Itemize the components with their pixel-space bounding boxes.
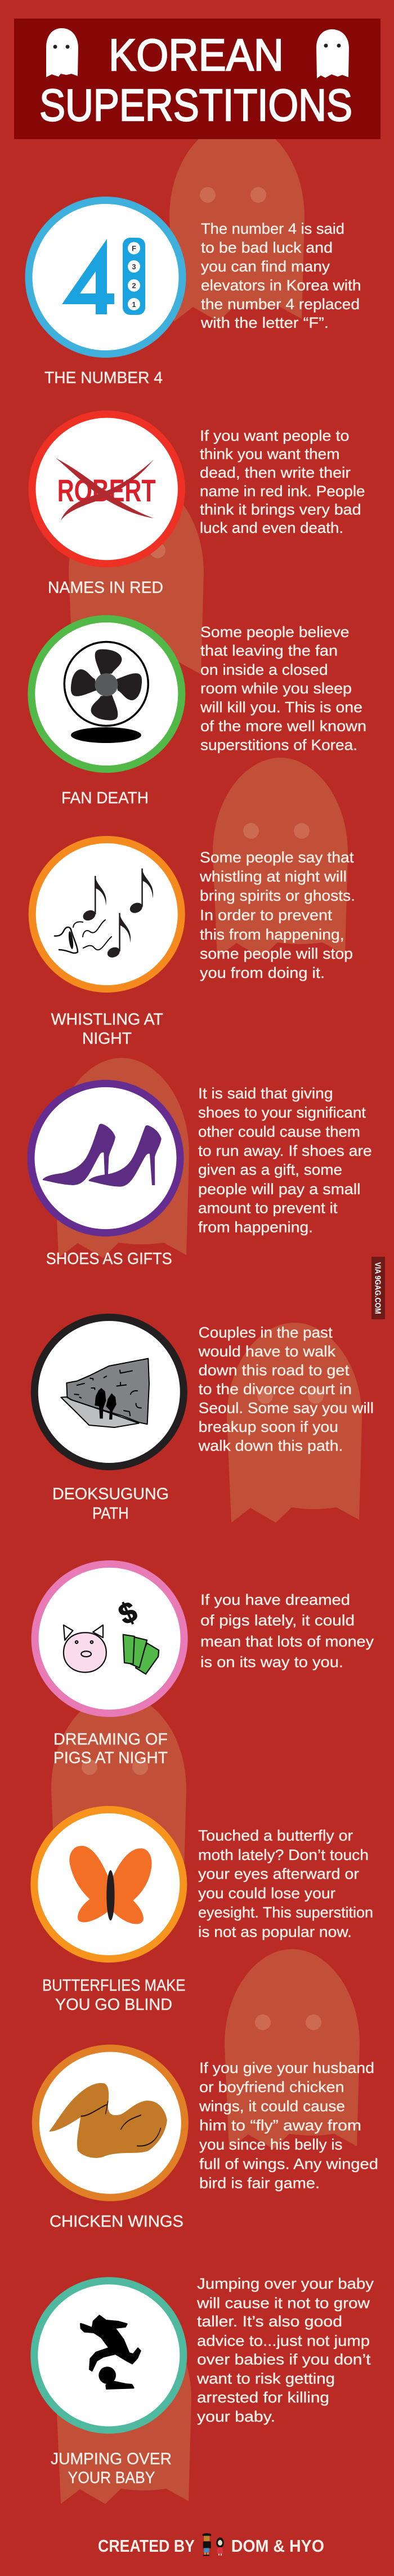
description: The number 4 is said <box>201 220 344 237</box>
background ghost 5 <box>227 1323 362 1523</box>
background ghost 6 <box>51 1694 186 1894</box>
panel: deoksugung path <box>34 1317 374 1523</box>
icon: boy and girl characters <box>202 2533 224 2556</box>
description: this from happening, <box>200 926 344 943</box>
description: walk down this path. <box>198 1437 343 1454</box>
description: to the divorce court in <box>199 1381 352 1398</box>
description: Jumping over your baby <box>197 2275 374 2292</box>
description: If you give your husband <box>199 2059 374 2076</box>
icon: high heels <box>31 1084 180 1233</box>
icon: stone wall and couple <box>34 1317 183 1467</box>
description: bird is fair game. <box>199 2175 320 2192</box>
description: breakup soon if you <box>199 1418 338 1435</box>
description: given as a gift, some <box>198 1162 342 1178</box>
icon: number 4 and elevator: 1 <box>132 300 136 309</box>
icon: right ghost <box>316 29 349 78</box>
icon: number 4 and elevator <box>29 201 182 354</box>
description: some people will stop <box>200 945 353 962</box>
description: you from doing it. <box>200 964 325 981</box>
description: want to risk getting <box>196 2370 335 2387</box>
description: from happening. <box>198 1219 313 1236</box>
title text <box>39 30 352 130</box>
label <box>51 1011 163 1048</box>
description: you could lose your <box>198 1885 335 1902</box>
description: room while you sleep <box>200 680 352 697</box>
description <box>199 2059 378 2192</box>
label: WHISTLING AT <box>51 1011 163 1029</box>
panel: dreaming of pigs <box>35 1564 374 1767</box>
label: SHOES AS GIFTS <box>46 1250 172 1268</box>
description: Touched a butterfly or <box>198 1827 353 1844</box>
label: NAMES IN RED <box>48 579 163 597</box>
description <box>200 220 361 331</box>
description: the number 4 replaced <box>201 296 360 313</box>
description: wings, it could cause <box>199 2098 345 2115</box>
description <box>198 1827 373 1940</box>
description: will kill you. This is one <box>200 699 362 716</box>
description <box>200 428 365 536</box>
description: Some people believe <box>200 624 349 640</box>
description <box>199 849 355 981</box>
description: of pigs lately, it could <box>200 1612 355 1629</box>
description: over babies if you don’t <box>197 2351 371 2368</box>
panel: the number 4 <box>29 201 361 387</box>
description: name in red ink. People <box>200 483 365 500</box>
description: luck and even death. <box>200 519 343 536</box>
description <box>198 1324 374 1454</box>
description: elevators in Korea with <box>201 277 361 294</box>
description <box>198 1085 372 1236</box>
description <box>196 2275 374 2425</box>
title banner <box>14 19 380 139</box>
description: on inside a closed <box>200 661 328 678</box>
icon: crossed out name: ROBERT <box>57 473 156 508</box>
background ghost 7 <box>225 1949 360 2149</box>
title text: KOREAN <box>109 30 284 80</box>
description: advice to...just not jump <box>197 2333 370 2350</box>
label <box>42 1977 186 2014</box>
description <box>200 624 366 754</box>
panel: whistling at night <box>32 839 355 1048</box>
description: to run away. If shoes are <box>198 1142 372 1159</box>
description: think it brings very bad <box>200 501 361 518</box>
label: NIGHT <box>82 1030 132 1048</box>
panel: names in red <box>32 414 365 597</box>
label <box>52 1485 169 1523</box>
title text: SUPERSTITIONS <box>39 80 352 130</box>
label: YOUR BABY <box>68 2469 155 2487</box>
description: It is said that giving <box>198 1085 333 1102</box>
icon: electric fan <box>32 619 182 769</box>
description: taller. It’s also good <box>197 2313 342 2330</box>
icon: left ghost <box>46 28 78 77</box>
description: eyesight. This superstition <box>198 1904 373 1921</box>
background ghost 1 <box>169 122 305 322</box>
description: mean that lots of money <box>200 1633 374 1650</box>
description: your baby. <box>197 2408 275 2425</box>
label: JUMPING OVER <box>51 2450 172 2468</box>
icon: butterfly <box>34 1809 183 1959</box>
description: Couples in the past <box>199 1324 333 1341</box>
description: will cause it not to grow <box>196 2295 370 2312</box>
description: bring spirits or ghosts. <box>200 887 355 904</box>
icon: chicken wing <box>35 2048 185 2197</box>
description: In order to prevent <box>200 907 333 924</box>
description: If you want people to <box>200 428 349 444</box>
watermark: via 9gag <box>371 1257 385 1319</box>
label: THE NUMBER 4 <box>44 369 163 387</box>
description: you since his belly is <box>199 2136 342 2153</box>
description: you can find many <box>201 258 330 275</box>
description: or boyfriend chicken <box>199 2079 344 2095</box>
panel: jumping over your baby <box>34 2275 374 2487</box>
footer credit <box>98 2533 324 2556</box>
description: whistling at night will <box>199 868 347 885</box>
icon: pig and money: $ <box>114 1595 142 1631</box>
icon: number 4 and elevator: F <box>132 244 136 252</box>
description: full of wings. Any winged <box>199 2155 378 2172</box>
label <box>51 2450 172 2487</box>
description: arrested for killing <box>197 2389 329 2406</box>
icon: crossed out name <box>32 414 181 564</box>
description: is not as popular now. <box>198 1923 352 1940</box>
description: to be bad luck and <box>201 239 333 256</box>
description <box>200 1591 374 1670</box>
description: moth lately? Don’t touch <box>198 1847 369 1863</box>
label <box>53 1730 168 1767</box>
background ghost 4 <box>54 1058 189 1258</box>
label: PATH <box>92 1505 129 1523</box>
description: If you have dreamed <box>200 1591 350 1608</box>
label: DEOKSUGUNG <box>52 1485 169 1503</box>
panel: fan death <box>32 619 366 807</box>
panel: butterflies <box>34 1809 373 2014</box>
background ghost 2 <box>69 477 204 677</box>
description: of the more well known <box>200 718 366 735</box>
label: YOU GO BLIND <box>55 1996 172 2014</box>
description: that leaving the fan <box>200 642 338 659</box>
label: BUTTERFLIES MAKE <box>42 1977 186 1995</box>
icon: number 4 and elevator: 2 <box>132 282 136 290</box>
description: other could cause them <box>198 1123 360 1140</box>
description: dead, then write their <box>200 464 351 481</box>
description: people will pay a small <box>198 1181 361 1198</box>
description: him to “fly” away from <box>199 2117 361 2134</box>
description: superstitions of Korea. <box>200 737 357 754</box>
description: amount to prevent it <box>198 1200 338 1217</box>
background ghost 8 <box>56 2304 191 2504</box>
description: shoes to your significant <box>198 1104 366 1121</box>
credit text right: DOM & HYO <box>231 2536 324 2556</box>
icon: person jumping over baby <box>34 2281 183 2430</box>
icon: number 4 and elevator: 3 <box>132 263 136 271</box>
description: would have to walk <box>198 1343 336 1360</box>
description: is on its way to you. <box>200 1653 343 1670</box>
label: DREAMING OF <box>53 1730 168 1749</box>
panel: chicken wings <box>35 2048 378 2231</box>
description: down this road to get <box>199 1362 350 1379</box>
label: FAN DEATH <box>61 789 149 807</box>
background ghost 3 <box>213 758 348 958</box>
label: PIGS AT NIGHT <box>53 1749 168 1767</box>
icon: whistling mouth and music notes <box>32 839 181 989</box>
watermark: via 9gag: VIA 9GAG.COM <box>373 1262 383 1314</box>
description: Some people say that <box>200 849 354 866</box>
credit text left: CREATED BY <box>98 2536 195 2556</box>
description: Seoul. Some say you will <box>199 1399 374 1416</box>
description: with the letter “F”. <box>200 314 329 331</box>
label: CHICKEN WINGS <box>50 2213 183 2231</box>
description: your eyes afterward or <box>198 1866 359 1883</box>
description: think you want them <box>200 446 340 462</box>
panel: shoes as gifts <box>31 1084 372 1268</box>
icon: pig and money <box>35 1564 184 1714</box>
